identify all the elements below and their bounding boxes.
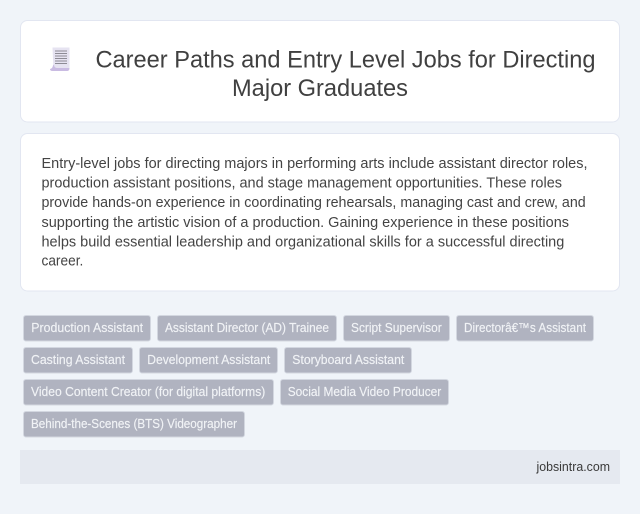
tag: Assistant Director <box>158 316 336 341</box>
tag: Assistant Director: Assistant Director (AD) Trainee <box>165 321 329 335</box>
tag: Behind-the-Scenes Videographer <box>24 412 244 437</box>
tag: Director's Assistant <box>456 316 594 341</box>
tag: Development Assistant <box>140 348 278 373</box>
title: Major Graduates <box>232 75 408 102</box>
description text: helps build essential leadership and organizational skills for a successful directing <box>42 234 564 250</box>
tag: Social Media Video Producer <box>280 380 448 405</box>
description text <box>42 156 588 270</box>
description text: supporting the artistic vision of a production. Gaining experience in these positions <box>42 215 569 231</box>
icon: paper scroll <box>50 48 70 71</box>
panel: title header <box>20 20 620 122</box>
tag: Casting Assistant: Casting Assistant <box>31 353 125 367</box>
panel: description <box>20 134 620 291</box>
description text: provide hands-on experience in coordinating rehearsals, managing cast and crew, and <box>42 195 586 211</box>
title <box>96 46 596 102</box>
footer <box>20 450 620 484</box>
job tags <box>24 316 594 437</box>
tag: Video Content Creator <box>24 380 274 405</box>
tag: Social Media Video Producer: Social Media Video Producer <box>288 385 441 399</box>
tag: Behind-the-Scenes Videographer: Behind-the-Scenes (BTS) Videographer <box>31 417 237 431</box>
tag: Script Supervisor: Script Supervisor <box>351 321 442 335</box>
title: Career Paths and Entry Level Jobs for Directing <box>96 46 596 74</box>
tag: Development Assistant: Development Assistant <box>147 353 271 367</box>
description text: production assistant positions, and stage management opportunities. These roles <box>42 176 562 192</box>
description text: Entry-level jobs for directing majors in performing arts include assistant director roles, <box>42 156 588 172</box>
footer: jobsintra.com <box>536 460 610 474</box>
tag: Storyboard Assistant: Storyboard Assistant <box>292 353 405 367</box>
tag: Script Supervisor <box>344 316 450 341</box>
tag: Production Assistant <box>24 316 150 341</box>
tag: Storyboard Assistant <box>284 348 412 373</box>
tag: Casting Assistant <box>24 348 132 373</box>
tag: Production Assistant: Production Assistant <box>31 321 143 335</box>
tag: Video Content Creator: Video Content Creator (for digital platforms) <box>31 385 265 399</box>
tag: Director's Assistant: Directorâ€™s Assistant <box>464 321 586 335</box>
description text: career. <box>42 254 83 270</box>
